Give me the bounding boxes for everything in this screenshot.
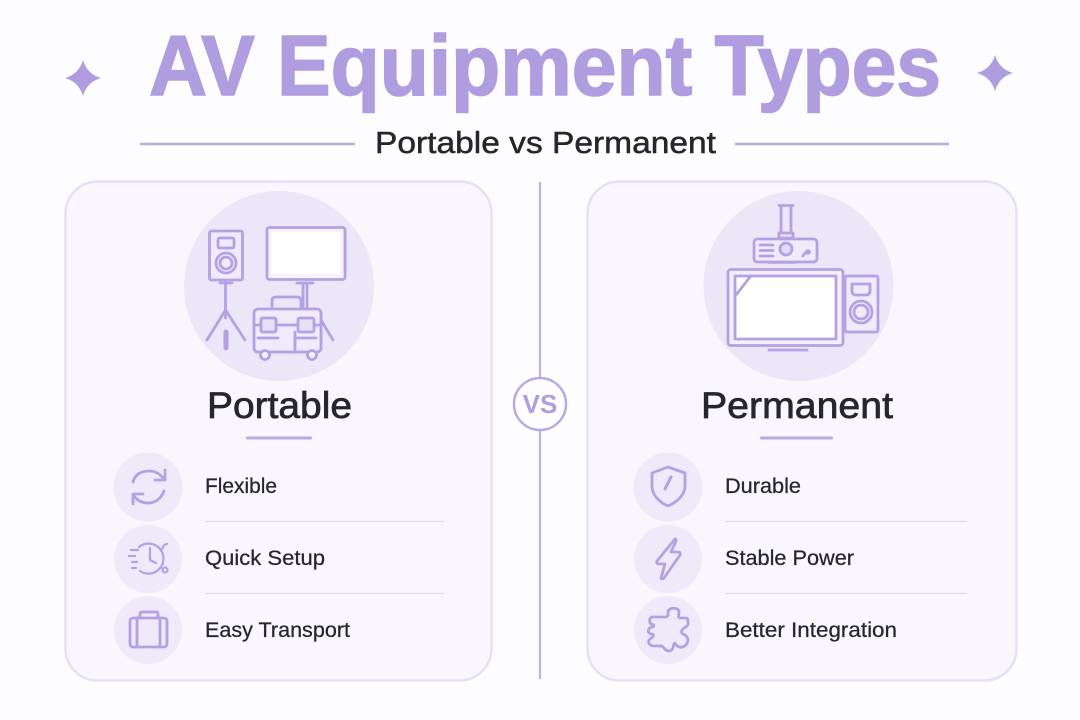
item: Durable bbox=[634, 452, 801, 522]
item: Easy Transport: Easy Transport bbox=[205, 619, 350, 642]
item: Better Integration: Better Integration bbox=[725, 619, 897, 642]
item: Flexible bbox=[114, 452, 277, 522]
item: Quick Setup bbox=[114, 525, 325, 593]
item: Stable Power: Stable Power bbox=[725, 547, 854, 570]
item: Stable Power bbox=[634, 525, 854, 593]
item: Durable: Durable bbox=[725, 475, 801, 498]
illustration: portable AV kit bbox=[184, 191, 374, 381]
icon: puzzle piece bbox=[648, 608, 688, 651]
heading underline bbox=[760, 436, 833, 440]
panel: portable bbox=[66, 182, 492, 680]
heading underline bbox=[246, 436, 312, 440]
subtitle: Portable vs Permanent bbox=[375, 125, 716, 160]
item: Flexible: Flexible bbox=[205, 475, 277, 498]
icon: left sparkle bbox=[65, 60, 101, 96]
icon: lightning bolt bbox=[657, 539, 680, 579]
item: Quick Setup: Quick Setup bbox=[205, 547, 325, 570]
vs badge: VS bbox=[523, 389, 557, 419]
icon: shield bbox=[652, 467, 685, 506]
vs badge bbox=[514, 378, 566, 430]
icon: briefcase bbox=[130, 612, 167, 647]
title: AV Equipment Types bbox=[149, 19, 941, 114]
item: Easy Transport bbox=[114, 596, 350, 664]
icon: refresh arrows bbox=[133, 470, 165, 504]
heading: Permanent: Permanent bbox=[701, 385, 894, 426]
heading: Portable: Portable bbox=[207, 385, 352, 426]
icon: right sparkle bbox=[977, 55, 1013, 91]
icon: fast clock bbox=[129, 544, 168, 574]
illustration: permanent AV install bbox=[704, 191, 894, 381]
panel: permanent bbox=[588, 182, 1016, 680]
center divider bbox=[539, 182, 541, 679]
item: Better Integration bbox=[634, 596, 897, 664]
